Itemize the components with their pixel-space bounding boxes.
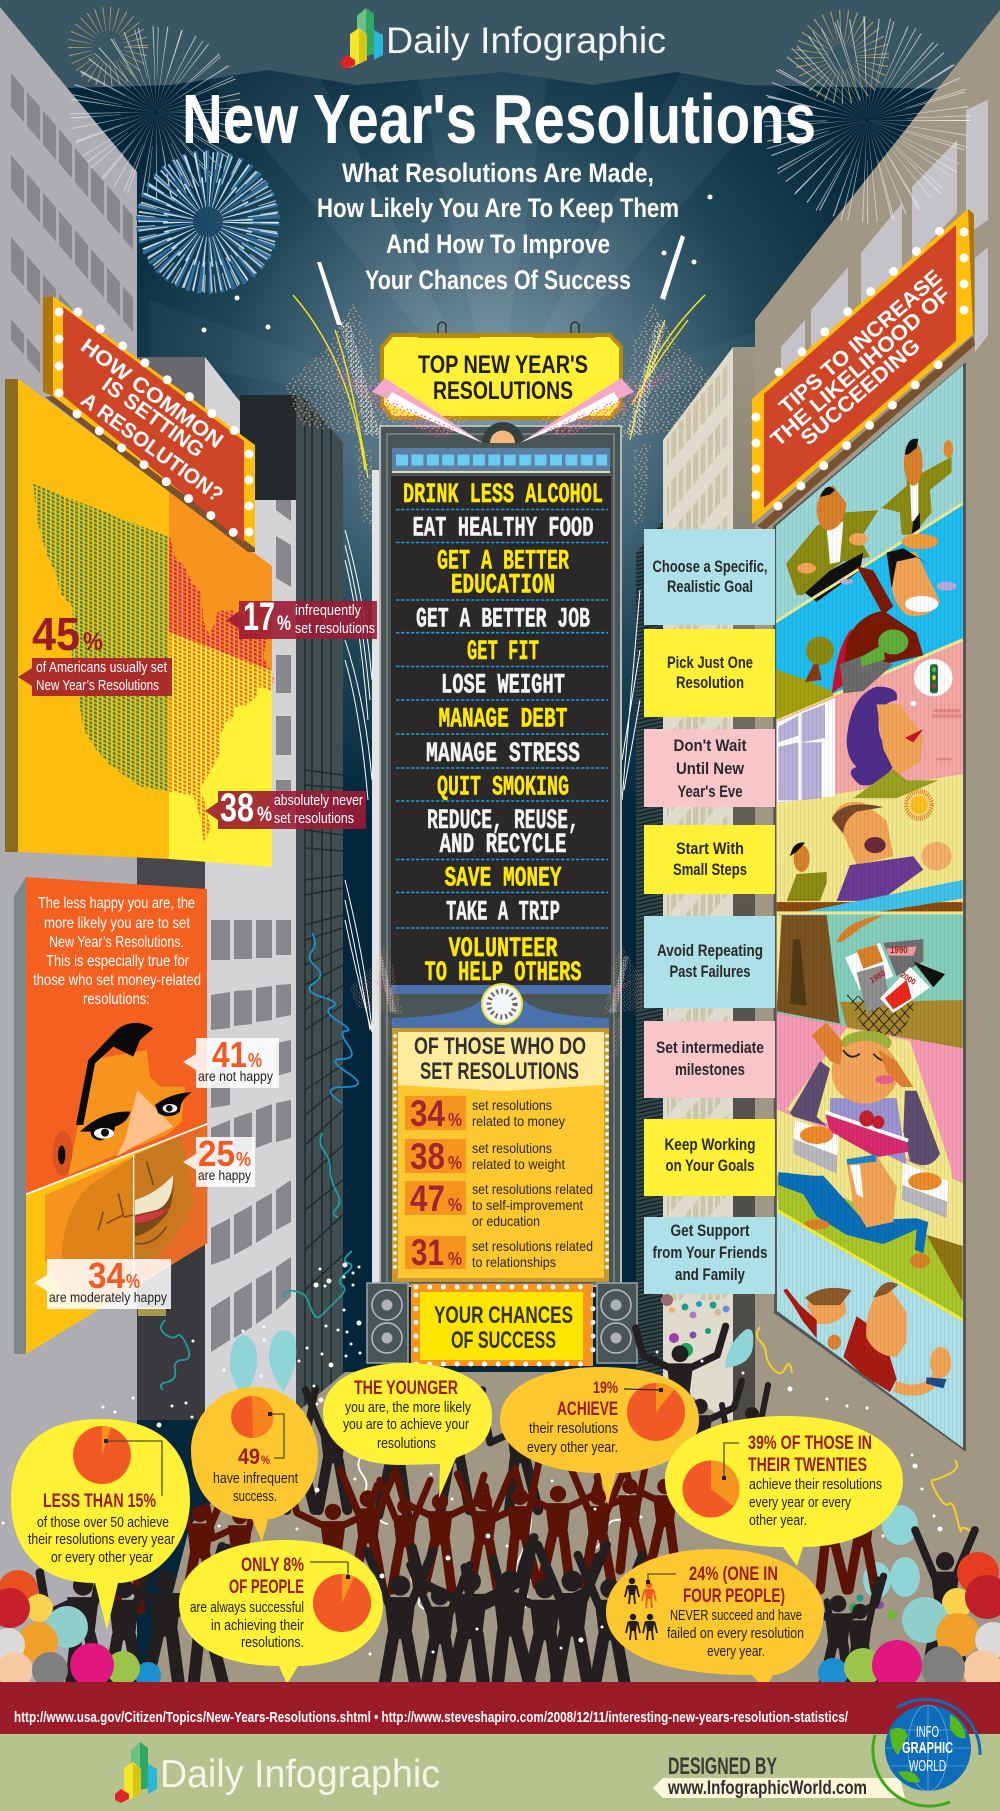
crowd silhouettes bbox=[40, 1326, 975, 1700]
stat 41 percent: 41 bbox=[212, 1034, 247, 1075]
list of resolutions: VOLUNTEER bbox=[448, 934, 558, 965]
stat numbers: 31 bbox=[411, 1232, 444, 1273]
bubble: only 8 percent: OF PEOPLE bbox=[229, 1577, 304, 1598]
stat descriptions: set resolutions bbox=[472, 1140, 552, 1156]
subtitle: Your Chances Of Success bbox=[365, 265, 631, 295]
list of resolutions: GET A BETTER JOB bbox=[416, 604, 590, 636]
stat descriptions: to self-improvement bbox=[472, 1197, 583, 1213]
bubble: 49 percent infrequent success bbox=[191, 1387, 318, 1542]
stat descriptions: set resolutions related bbox=[472, 1181, 593, 1197]
bubble: 24 percent never succeed: 24% (ONE IN bbox=[689, 1564, 778, 1585]
bubble: less than 15 percent: LESS THAN 15% bbox=[43, 1491, 156, 1512]
tips: text boxes: Keep Working bbox=[664, 1136, 756, 1154]
bubble: the younger: you are, the more likely bbox=[345, 1400, 472, 1416]
firework: white burst top right bbox=[795, 27, 939, 192]
stat 38 percent: % bbox=[257, 803, 272, 826]
sign: your chances of success: OF SUCCESS bbox=[451, 1327, 556, 1354]
stat descriptions: or education bbox=[472, 1213, 540, 1229]
list of resolutions: SAVE MONEY bbox=[444, 864, 562, 894]
tips: text boxes: Small Steps bbox=[673, 861, 747, 879]
tips: text boxes: Choose a Specific, bbox=[652, 558, 768, 576]
balloons right bbox=[818, 1552, 1000, 1690]
stat numbers: 47 bbox=[410, 1178, 445, 1219]
tips: text boxes: Past Failures bbox=[670, 963, 750, 981]
bubble: 39 percent of those in their twenties: other year. bbox=[749, 1513, 807, 1529]
bubble: only 8 percent: ONLY 8% bbox=[241, 1555, 304, 1576]
panel: left billboard how common bbox=[0, 300, 377, 867]
list of resolutions: TAKE A TRIP bbox=[446, 898, 560, 928]
panel: orange happiness billboard bbox=[14, 877, 279, 1354]
cartoon scenes lower bbox=[777, 880, 963, 1392]
right tan building bbox=[755, 10, 1000, 1430]
stat 45 percent: of Americans usually set bbox=[36, 660, 167, 676]
panel: sign top resolutions: RESOLUTIONS bbox=[433, 377, 573, 405]
marquee: tips to increase: THE LIKELIHOOD OF bbox=[766, 283, 955, 451]
designed by credit: DESIGNED BY bbox=[668, 1753, 777, 1780]
paragraph bbox=[33, 895, 201, 1008]
rocket trails and sprays bbox=[285, 235, 721, 1032]
stat descriptions: related to money bbox=[472, 1113, 565, 1129]
bubble: 49 percent infrequent success: 49 bbox=[238, 1444, 260, 1469]
tips: text boxes: on Your Goals bbox=[666, 1157, 754, 1175]
panel: of those who do set resolutions bbox=[392, 1028, 609, 1282]
marquee: tips to increase: TIPS TO INCREASE bbox=[775, 266, 946, 419]
stat 25 percent: % bbox=[236, 1149, 251, 1171]
stat numbers bbox=[410, 1093, 462, 1273]
stat 17 percent bbox=[227, 595, 377, 639]
stat 34 percent: % bbox=[126, 1271, 140, 1293]
firework: blue burst bbox=[146, 160, 270, 284]
stat numbers: % bbox=[448, 1195, 462, 1215]
stat numbers: % bbox=[448, 1153, 462, 1173]
dark center-left building bbox=[137, 357, 205, 1420]
subtitle: What Resolutions Are Made, bbox=[342, 158, 654, 188]
stat 41 percent: % bbox=[248, 1050, 262, 1072]
blue arch with medallion bbox=[350, 945, 656, 1060]
stat 34 percent: are moderately happy bbox=[49, 1289, 167, 1305]
stat numbers: % bbox=[448, 1249, 462, 1269]
cartoon scenes lower: 2000 bbox=[899, 970, 917, 987]
stat 17 percent: % bbox=[277, 612, 291, 635]
bubble: 39 percent of those in their twenties: achieve their resolutions bbox=[749, 1477, 882, 1493]
right beige building bbox=[663, 347, 756, 1422]
blue light strip bbox=[392, 448, 610, 473]
balloons left bbox=[0, 1570, 161, 1688]
list of resolutions: EAT HEALTHY FOOD bbox=[412, 514, 594, 544]
paragraph: This is especially true for bbox=[46, 953, 189, 970]
stat 41 percent bbox=[183, 1034, 279, 1088]
paragraph: those who set money-related bbox=[33, 972, 201, 989]
bubble: 39 percent of those in their twenties bbox=[665, 1416, 903, 1566]
subtitle: And How To Improve bbox=[386, 229, 610, 259]
sign: your chances of success: YOUR CHANCES bbox=[434, 1302, 573, 1329]
sparkle cones over sign corners bbox=[372, 378, 634, 443]
tips: text boxes: from Your Friends bbox=[652, 1244, 768, 1262]
stat numbers: % bbox=[448, 1110, 462, 1130]
designed by credit: www.InfographicWorld.com bbox=[667, 1778, 867, 1799]
list of resolutions: DRINK LESS ALCOHOL bbox=[403, 480, 603, 511]
stat 38 percent: absolutely never bbox=[274, 793, 363, 809]
bubble: 39 percent of those in their twenties: every year or every bbox=[749, 1495, 852, 1511]
bubble: less than 15 percent: of those over 50 achieve bbox=[37, 1515, 169, 1531]
top logo: Daily Infographic bbox=[386, 20, 666, 61]
list of resolutions bbox=[403, 480, 603, 989]
tips: text boxes: Resolution bbox=[676, 674, 744, 692]
list of resolutions: MANAGE DEBT bbox=[438, 704, 568, 736]
stat 38 percent: set resolutions bbox=[274, 811, 354, 827]
globe logo: WORLD bbox=[909, 1758, 946, 1775]
bubble: the younger bbox=[323, 1363, 492, 1498]
list of resolutions: QUIT SMOKING bbox=[437, 772, 569, 804]
footer: green band with logo: Daily Infographic bbox=[160, 1753, 440, 1796]
stat 25 percent: 25 bbox=[198, 1133, 235, 1174]
stat 34 percent bbox=[34, 1255, 171, 1309]
list of resolutions: LOSE WEIGHT bbox=[441, 670, 565, 702]
marquee: tips to increase: SUCCEEDING bbox=[797, 334, 925, 450]
tips: text boxes: Start With bbox=[676, 840, 744, 858]
panel: resolutions board bbox=[391, 476, 611, 989]
tips: text boxes: Get Support bbox=[670, 1222, 750, 1240]
bubble: less than 15 percent: their resolutions every year bbox=[28, 1532, 175, 1548]
footer: source bar bbox=[0, 1682, 1000, 1734]
stat descriptions: set resolutions bbox=[472, 1097, 552, 1113]
tips: text boxes: milestones bbox=[675, 1061, 745, 1079]
globe logo: INFO bbox=[916, 1724, 939, 1741]
snow dots bbox=[3, 197, 940, 1654]
stat 38 percent bbox=[205, 786, 366, 830]
bubble: 24 percent never succeed bbox=[606, 1549, 824, 1684]
bubble: 49 percent infrequent success: have infrequent bbox=[213, 1471, 298, 1487]
stat descriptions bbox=[472, 1097, 593, 1270]
list of resolutions: TO HELP OTHERS bbox=[424, 958, 582, 989]
globe logo: GRAPHIC bbox=[902, 1740, 953, 1757]
tips: text boxes bbox=[644, 529, 775, 1294]
stat descriptions: to relationships bbox=[472, 1254, 556, 1270]
panel: sign top resolutions bbox=[382, 322, 621, 418]
bubble: 49 percent infrequent success: % bbox=[261, 1453, 270, 1467]
list of resolutions: GET A BETTER bbox=[437, 546, 569, 578]
bubble: 24 percent never succeed: FOUR PEOPLE) bbox=[683, 1586, 785, 1607]
cartoon scenes upper bbox=[776, 439, 963, 901]
black glass tower bbox=[240, 395, 343, 1430]
bubble: 24 percent never succeed: every year. bbox=[707, 1644, 765, 1660]
ground behind the crowd bbox=[150, 1372, 1000, 1682]
stat 41 percent: are not happy bbox=[198, 1068, 273, 1084]
marquee: how common is setting a resolution: HOW COMMON bbox=[76, 334, 227, 453]
stat 17 percent: set resolutions bbox=[295, 621, 375, 637]
dotted map of the USA bbox=[33, 484, 274, 842]
tips: text boxes: Don't Wait bbox=[674, 737, 747, 755]
tips: text boxes: Realistic Goal bbox=[667, 578, 753, 596]
stat 45 percent: % bbox=[83, 628, 103, 656]
stat 45 percent bbox=[18, 608, 172, 696]
bubble: only 8 percent: are always successful bbox=[190, 1600, 304, 1616]
bubble: only 8 percent bbox=[179, 1540, 383, 1684]
heading: SET RESOLUTIONS bbox=[420, 1058, 579, 1085]
list of resolutions: MANAGE STRESS bbox=[426, 739, 580, 770]
marquee: how common is setting a resolution bbox=[43, 296, 255, 552]
bubble: 24 percent never succeed: failed on every resolution bbox=[667, 1626, 804, 1642]
speakers bbox=[367, 1283, 637, 1363]
illustration: split face bbox=[26, 1023, 207, 1307]
stat 34 percent: 34 bbox=[88, 1255, 125, 1296]
bubble: 39 percent of those in their twenties: 39% OF THOSE IN bbox=[748, 1433, 872, 1454]
title: New Year's Resolutions bbox=[182, 80, 816, 158]
cartoon scenes lower: 1980 bbox=[868, 968, 887, 985]
marquee: tips to increase bbox=[752, 209, 975, 530]
marquee: how common is setting a resolution: A RESOLUTION? bbox=[76, 388, 227, 507]
tips: text boxes: Pick Just One bbox=[667, 654, 753, 672]
tips: text boxes: Year's Eve bbox=[678, 783, 742, 801]
subtitle bbox=[317, 158, 679, 295]
list of resolutions: EDUCATION bbox=[451, 570, 555, 602]
footer: green band with logo bbox=[0, 1734, 1000, 1811]
stat 38 percent: 38 bbox=[220, 786, 254, 830]
marquee: how common is setting a resolution: IS SETTING bbox=[98, 373, 208, 462]
right glass tower bbox=[636, 521, 663, 1400]
heading: OF THOSE WHO DO bbox=[414, 1033, 586, 1060]
paragraph: The less happy you are, the bbox=[38, 895, 195, 912]
bubble: less than 15 percent: or every other year bbox=[51, 1550, 153, 1566]
bubble: 19 percent achieve: every other year. bbox=[527, 1440, 618, 1456]
paragraph: New Year’s Resolutions. bbox=[49, 934, 184, 951]
bubble: only 8 percent: resolutions. bbox=[241, 1635, 304, 1651]
panel: sign top resolutions: TOP NEW YEAR'S bbox=[418, 351, 588, 379]
bubble: only 8 percent: in achieving their bbox=[211, 1618, 304, 1634]
panel: tips illustration wall bbox=[773, 362, 966, 1452]
firework: gold top left bbox=[80, 19, 216, 172]
stat descriptions: set resolutions related bbox=[472, 1238, 593, 1254]
bubble: the younger: resolutions bbox=[377, 1436, 436, 1452]
tips: text boxes: Set intermediate bbox=[656, 1039, 764, 1057]
tips: text boxes: Until New bbox=[676, 760, 744, 778]
top logo bbox=[341, 8, 666, 69]
list of resolutions: REDUCE, REUSE, bbox=[427, 806, 579, 837]
bubble: the younger: THE YOUNGER bbox=[354, 1378, 458, 1399]
bubble: 19 percent achieve bbox=[500, 1367, 699, 1505]
bubble: 19 percent achieve: 19% bbox=[593, 1378, 618, 1397]
paragraph: more likely you are to set bbox=[44, 915, 191, 932]
party balloons and confetti bbox=[230, 1294, 920, 1620]
sign: your chances of success bbox=[411, 1284, 593, 1366]
stat 25 percent bbox=[183, 1133, 255, 1187]
paragraph: resolutions: bbox=[83, 991, 150, 1008]
stat 25 percent: are happy bbox=[198, 1167, 251, 1183]
globe logo bbox=[873, 1700, 980, 1806]
bubble: the younger: you are to achieve your bbox=[343, 1417, 469, 1433]
stat boxes bbox=[405, 1096, 466, 1269]
bubble: 39 percent of those in their twenties: THEIR TWENTIES bbox=[748, 1455, 867, 1476]
stat 17 percent: 17 bbox=[243, 595, 275, 639]
subtitle: How Likely You Are To Keep Them bbox=[317, 193, 679, 223]
tips: text boxes: Avoid Repeating bbox=[657, 942, 763, 960]
stat numbers: 34 bbox=[410, 1093, 445, 1134]
stat numbers: 38 bbox=[410, 1136, 445, 1177]
stat 17 percent: infrequently bbox=[295, 603, 362, 619]
bubble: less than 15 percent bbox=[11, 1419, 190, 1630]
stat 45 percent: 45 bbox=[32, 608, 80, 660]
stat descriptions: related to weight bbox=[472, 1156, 565, 1172]
heading bbox=[414, 1033, 586, 1085]
cartoon scenes lower: 1990 bbox=[890, 944, 908, 955]
bubble: 19 percent achieve: ACHIEVE bbox=[557, 1399, 618, 1420]
stat 45 percent: New Year’s Resolutions bbox=[36, 678, 159, 694]
list of resolutions: AND RECYCLE bbox=[440, 830, 566, 861]
bubble: 19 percent achieve: their resolutions bbox=[529, 1421, 618, 1437]
light gray building with windows bbox=[205, 357, 296, 1450]
streamers bbox=[161, 933, 975, 1640]
central tower frame bbox=[372, 422, 621, 1286]
tips: text boxes: and Family bbox=[675, 1266, 746, 1284]
designed by credit bbox=[653, 1753, 905, 1799]
left gray building bbox=[0, 7, 137, 1682]
bubble: 24 percent never succeed: NEVER succeed and have bbox=[670, 1608, 802, 1624]
list of resolutions: GET FIT bbox=[467, 637, 539, 668]
bubble: 49 percent infrequent success: success. bbox=[233, 1489, 277, 1505]
